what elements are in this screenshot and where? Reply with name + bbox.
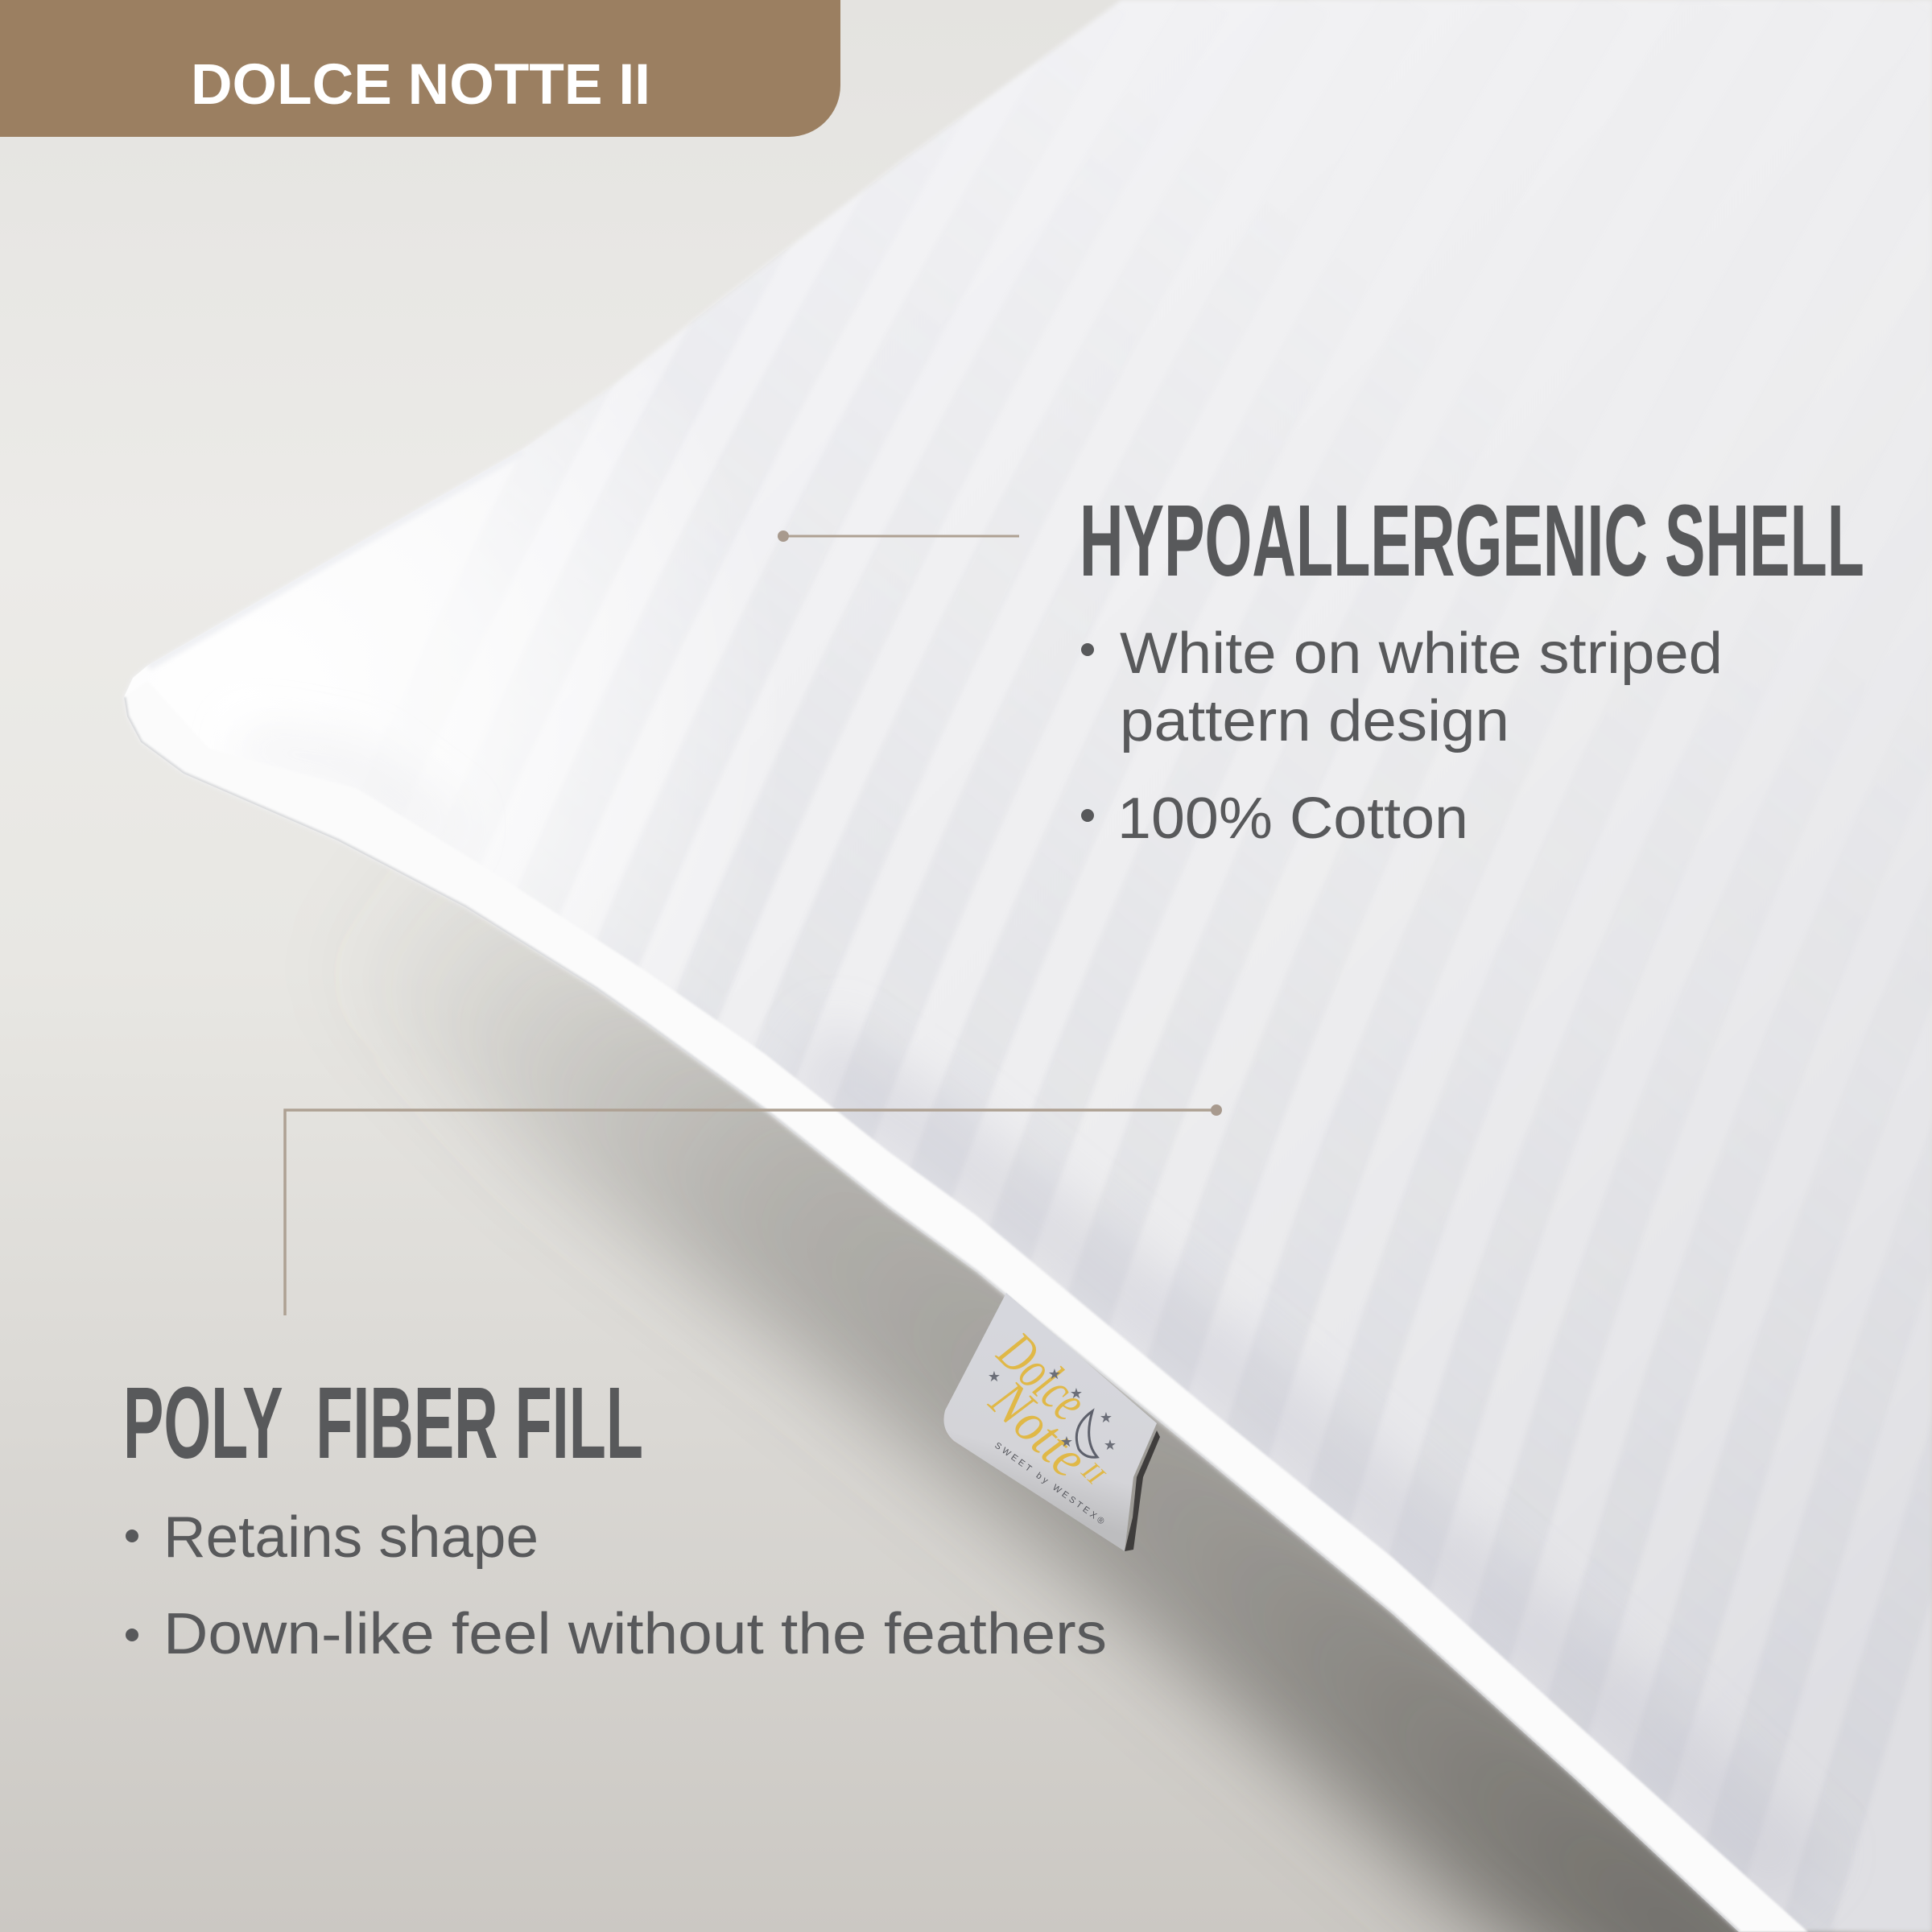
tag stars and moon: ★ [1104,1437,1117,1453]
bullet list: fill [126,1505,1107,1666]
heading: poly fiber fill: POLY FIBER FILL [123,1366,643,1480]
pillow piping [124,681,1808,1932]
bullet list: fill: Down-like feel without the feathers [163,1602,1107,1666]
bullet list: fill: Retains shape [163,1505,539,1570]
tag brand name: Dolce [985,1321,1099,1433]
text block: hypoallergenic shell [1080,484,1864,851]
tag stars and moon: ★ [1070,1385,1083,1402]
bullet list: shell: 100% Cotton [1117,786,1468,851]
leader line: shell [778,530,1019,542]
pillow tag [943,1293,1160,1551]
tag stars and moon [988,1366,1117,1457]
tag maker line: SWEET by WESTEX® [993,1441,1106,1526]
tag stars and moon: ★ [988,1368,1001,1385]
tag dark underside [1125,1430,1160,1551]
tag body [943,1293,1157,1551]
tag brand name: Notte [977,1369,1099,1489]
pillow shadow [322,483,1932,1908]
tag stars and moon: ★ [1048,1366,1061,1382]
tag stars and moon: ★ [1060,1434,1073,1450]
title text: DOLCE NOTTE II [191,53,650,117]
text block: poly fiber fill [123,1366,1107,1666]
leader line: fill [285,1104,1222,1315]
title banner [0,0,840,137]
bullet list: shell: White on white striped [1120,621,1723,686]
tag brand name [977,1321,1111,1492]
pillow inner shading [147,450,1803,1884]
bullet list: shell [1081,621,1723,851]
tag brand name: II [1075,1455,1111,1492]
pillow corner highlight [125,431,654,940]
pillow stripes [601,683,1880,1929]
tag stars and moon: ★ [1100,1410,1113,1426]
bullet list: shell: pattern design [1120,689,1509,753]
